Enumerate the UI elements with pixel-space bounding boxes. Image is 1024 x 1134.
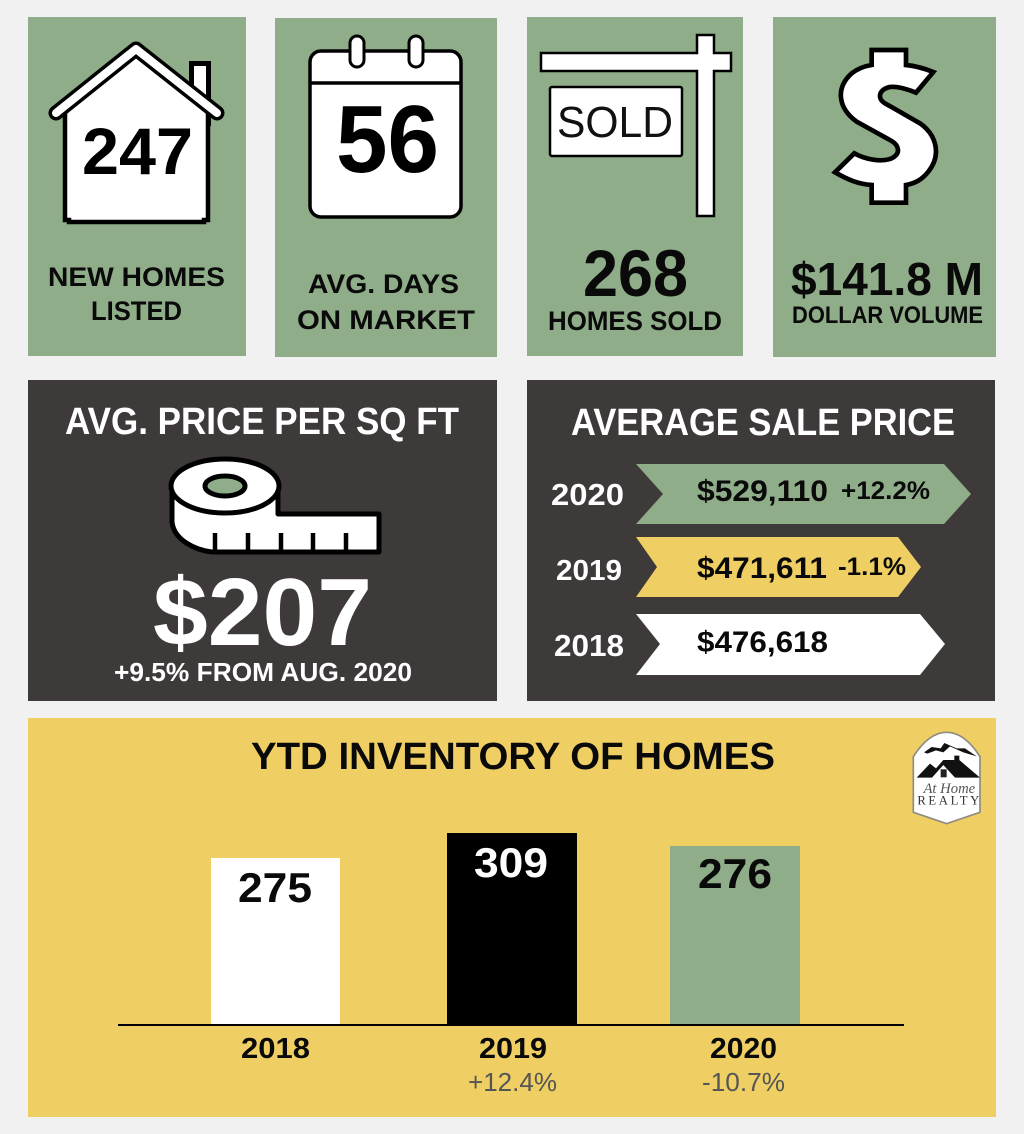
bar: 2018 xyxy=(211,858,340,1065)
logo: at home realty: REALTY xyxy=(917,793,979,807)
heading: ytd inventory: YTD INVENTORY OF HOMES xyxy=(251,736,775,778)
panel: ytd inventory of homes xyxy=(28,718,996,1117)
panel: homes sold xyxy=(527,17,743,356)
bar: 2020 xyxy=(670,846,800,1097)
panel: new homes listed xyxy=(28,17,246,356)
icon: dollar sign xyxy=(835,50,936,203)
panel: dollar volume xyxy=(773,17,996,357)
row: 2020 price: +12.2% xyxy=(841,477,930,505)
number: 268: 268 xyxy=(583,236,688,310)
label: homes sold: HOMES SOLD xyxy=(548,306,722,336)
row: 2020 price: 2020 xyxy=(551,477,624,512)
bar: 2018: 2018 xyxy=(241,1033,310,1065)
bar: 2019: 2019 xyxy=(479,1033,547,1065)
row: 2020 price xyxy=(551,464,971,524)
icon: calendar xyxy=(310,36,461,217)
panel: average days on market xyxy=(275,18,497,357)
label: new homes listed xyxy=(48,262,225,326)
row: 2018 price: $476,618 xyxy=(697,626,828,659)
bar: 2020: -10.7% xyxy=(702,1067,785,1097)
icon: house xyxy=(56,49,217,222)
row: 2019 price xyxy=(556,537,921,597)
label: avg days on market xyxy=(297,269,476,335)
icon: tape measure xyxy=(171,459,379,552)
logo: at home realty xyxy=(913,732,980,824)
label: avg days on market: ON MARKET xyxy=(297,305,476,335)
bar: 2019: 309 xyxy=(474,839,548,886)
label: avg days on market: AVG. DAYS xyxy=(308,269,459,299)
bar chart xyxy=(118,833,904,1097)
heading: average sale price: AVERAGE SALE PRICE xyxy=(571,402,955,444)
number: $207: $207 xyxy=(153,559,372,666)
bar: 2020: 2020 xyxy=(710,1033,777,1065)
bar: 2019: +12.4% xyxy=(468,1067,557,1097)
bar: 2018: 275 xyxy=(238,864,312,911)
panel: average price per sq ft xyxy=(28,380,497,701)
bar: 2020: 276 xyxy=(698,850,772,897)
panel: average sale price xyxy=(527,380,995,701)
label: dollar volume: DOLLAR VOLUME xyxy=(792,302,983,329)
bar: 2019 xyxy=(447,833,577,1097)
label: new homes listed: LISTED xyxy=(91,296,182,326)
heading: avg price per sq ft: AVG. PRICE PER SQ FT xyxy=(65,401,459,443)
row: 2018 price xyxy=(554,614,945,675)
number: dollar volume: $141.8 M xyxy=(791,253,983,305)
row: 2019 price: $471,611 xyxy=(697,552,827,585)
number: 56: 56 xyxy=(336,86,439,193)
logo: at home realty: At Home xyxy=(922,781,976,797)
icon: sold sign xyxy=(541,35,731,216)
row: 2018 price: 2018 xyxy=(554,628,624,663)
note: change from aug 2020: +9.5% FROM AUG. 2020 xyxy=(114,657,412,687)
row: 2020 price: $529,110 xyxy=(697,475,828,508)
icon: sold sign: SOLD xyxy=(557,98,673,147)
number: 247: 247 xyxy=(82,114,193,188)
label: new homes listed: NEW HOMES xyxy=(48,262,225,292)
row: 2019 price: -1.1% xyxy=(838,553,906,581)
row: 2019 price: 2019 xyxy=(556,555,622,587)
